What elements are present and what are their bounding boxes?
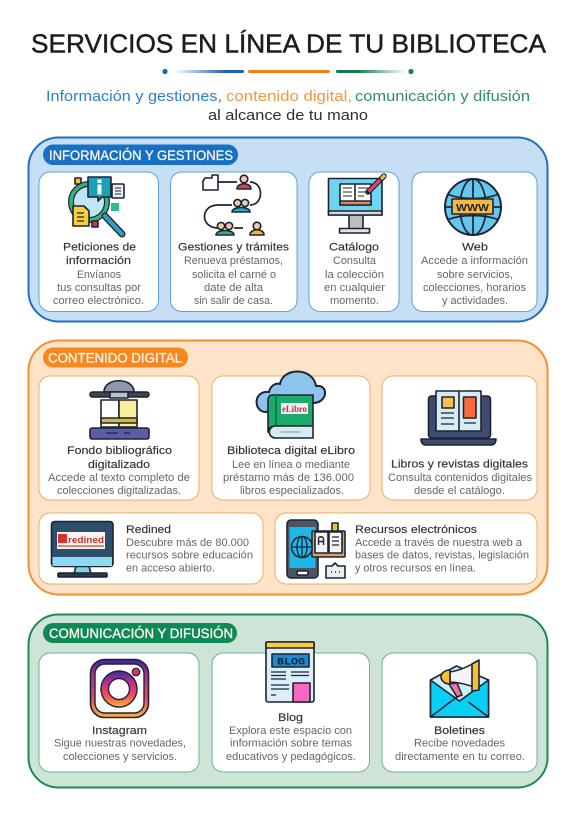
heading: Biblioteca digital eLibro	[227, 445, 355, 457]
heading: información	[66, 255, 131, 267]
description: colecciones digitalizadas.	[57, 485, 181, 497]
heading: Boletines	[434, 725, 485, 737]
description: solicita el carné o	[192, 269, 276, 281]
icon: cloud and green book: eLibro	[282, 404, 307, 414]
description: Sigue nuestras novedades,	[54, 738, 186, 750]
card: web	[412, 172, 537, 312]
icon: laptop with open book	[421, 391, 496, 445]
description: correo electrónico.	[53, 295, 144, 307]
heading: Redined	[126, 524, 171, 536]
icon: blog page	[266, 642, 314, 702]
heading	[63, 242, 136, 267]
divider with coloured lines	[162, 69, 414, 74]
description	[421, 255, 528, 307]
description: sin salir de casa.	[194, 295, 273, 307]
description: Accede a información	[421, 255, 528, 267]
heading	[67, 445, 172, 471]
icon: cloud and green book	[257, 371, 325, 438]
heading: Blog	[278, 712, 303, 724]
description: desde el catálogo.	[414, 485, 505, 497]
description: colecciones, horarios	[423, 282, 527, 294]
heading: Catálogo	[329, 242, 379, 254]
description: libros especializados.	[240, 485, 344, 497]
icon: magnifier with info	[71, 177, 124, 234]
heading: Peticiones de	[63, 242, 136, 254]
subtitle	[46, 88, 530, 124]
description: Envíanos	[77, 269, 122, 281]
card: instagram	[39, 653, 199, 772]
panel: información y gestiones	[28, 138, 548, 322]
heading pill: contenido digital	[43, 348, 188, 368]
heading pill: información y gestiones: INFORMACIÓN Y GESTIONES	[49, 148, 233, 163]
title: SERVICIOS EN LÍNEA DE TU BIBLIOTECA	[31, 30, 546, 58]
description: préstamo más de 136.000	[223, 472, 354, 484]
panel: contenido digital	[28, 340, 548, 594]
card: redined	[39, 513, 263, 584]
description: Descubre más de 80.000	[126, 537, 249, 549]
heading: Instagram	[92, 725, 147, 737]
description: en cualquier	[324, 282, 385, 294]
card: catálogo	[309, 172, 399, 312]
subtitle: Información y gestiones,	[46, 88, 222, 105]
description: tus consultas por	[57, 282, 141, 294]
description: sobre servicios,	[437, 269, 513, 281]
description	[324, 255, 385, 307]
icon: monitor with redined logo	[52, 522, 113, 577]
description	[226, 725, 356, 763]
panel: comunicación y difusión	[28, 614, 548, 788]
description: la colección	[325, 269, 384, 281]
card: fondo bibliográfico digitalizado	[39, 376, 199, 500]
description: bases de datos, revistas, legislación	[355, 550, 529, 562]
description: Accede al texto completo de	[48, 472, 190, 484]
description: date de alta	[204, 282, 263, 294]
description: Accede a través de nuestra web a	[355, 537, 522, 549]
card: biblioteca digital elibro	[212, 371, 370, 500]
description	[184, 255, 283, 307]
description: en acceso abierto.	[126, 562, 215, 574]
description	[388, 472, 533, 497]
heading: Libros y revistas digitales	[391, 458, 528, 470]
subtitle: al alcance de tu mano	[208, 107, 368, 124]
heading pill: contenido digital: CONTENIDO DIGITAL	[48, 350, 182, 366]
description	[355, 537, 529, 574]
icon: globe with www: WWW	[456, 202, 489, 214]
description: Consulta	[333, 255, 376, 267]
description: Consulta contenidos digitales	[388, 472, 533, 484]
heading pill: comunicación y difusión: COMUNICACIÓN Y DIFUSIÓN	[49, 626, 233, 641]
description: recursos sobre educación	[126, 550, 253, 562]
heading: Recursos electrónicos	[355, 524, 477, 536]
icon: blog page: BLOG	[277, 658, 305, 668]
icon: phone with globe and book	[287, 520, 345, 578]
description: directamente en tu correo.	[395, 751, 525, 763]
description: Explora este espacio con	[229, 725, 352, 737]
description: momento.	[330, 295, 379, 307]
description	[54, 738, 186, 763]
heading: Web	[462, 242, 488, 254]
heading: digitalizado	[88, 459, 150, 471]
subtitle: comunicación y difusión	[355, 88, 530, 105]
card: blog	[212, 642, 370, 772]
heading: Gestiones y trámites	[178, 242, 289, 254]
description	[48, 472, 190, 497]
card: recursos electrónicos	[275, 513, 537, 584]
card: libros y revistas digitales	[382, 376, 537, 500]
icon: monitor with book	[328, 175, 385, 233]
icon: book scanner	[90, 381, 149, 439]
description	[223, 459, 354, 497]
subtitle: contenido digital,	[226, 88, 352, 105]
description	[395, 738, 525, 763]
heading: Fondo bibliográfico	[67, 445, 172, 457]
description: Lee en línea o mediante	[232, 459, 350, 471]
card: gestiones y trámites	[170, 172, 297, 312]
description: y actividades.	[442, 295, 508, 307]
description: Recibe novedades	[414, 738, 506, 750]
description: información sobre temas	[230, 738, 353, 750]
icon: instagram	[90, 660, 148, 718]
card: boletines	[382, 653, 537, 772]
icon: workflow	[203, 175, 264, 235]
icon: envelope with megaphone	[430, 660, 488, 717]
description	[53, 269, 144, 307]
description: Renueva préstamos,	[184, 255, 283, 267]
icon: monitor with redined logo: redined	[68, 535, 104, 546]
description: y otros recursos en línea.	[355, 562, 476, 574]
card: peticiones de información	[39, 172, 158, 312]
description: colecciones y servicios.	[63, 751, 177, 763]
description: educativos y pedagógicos.	[226, 751, 356, 763]
description	[126, 537, 253, 574]
